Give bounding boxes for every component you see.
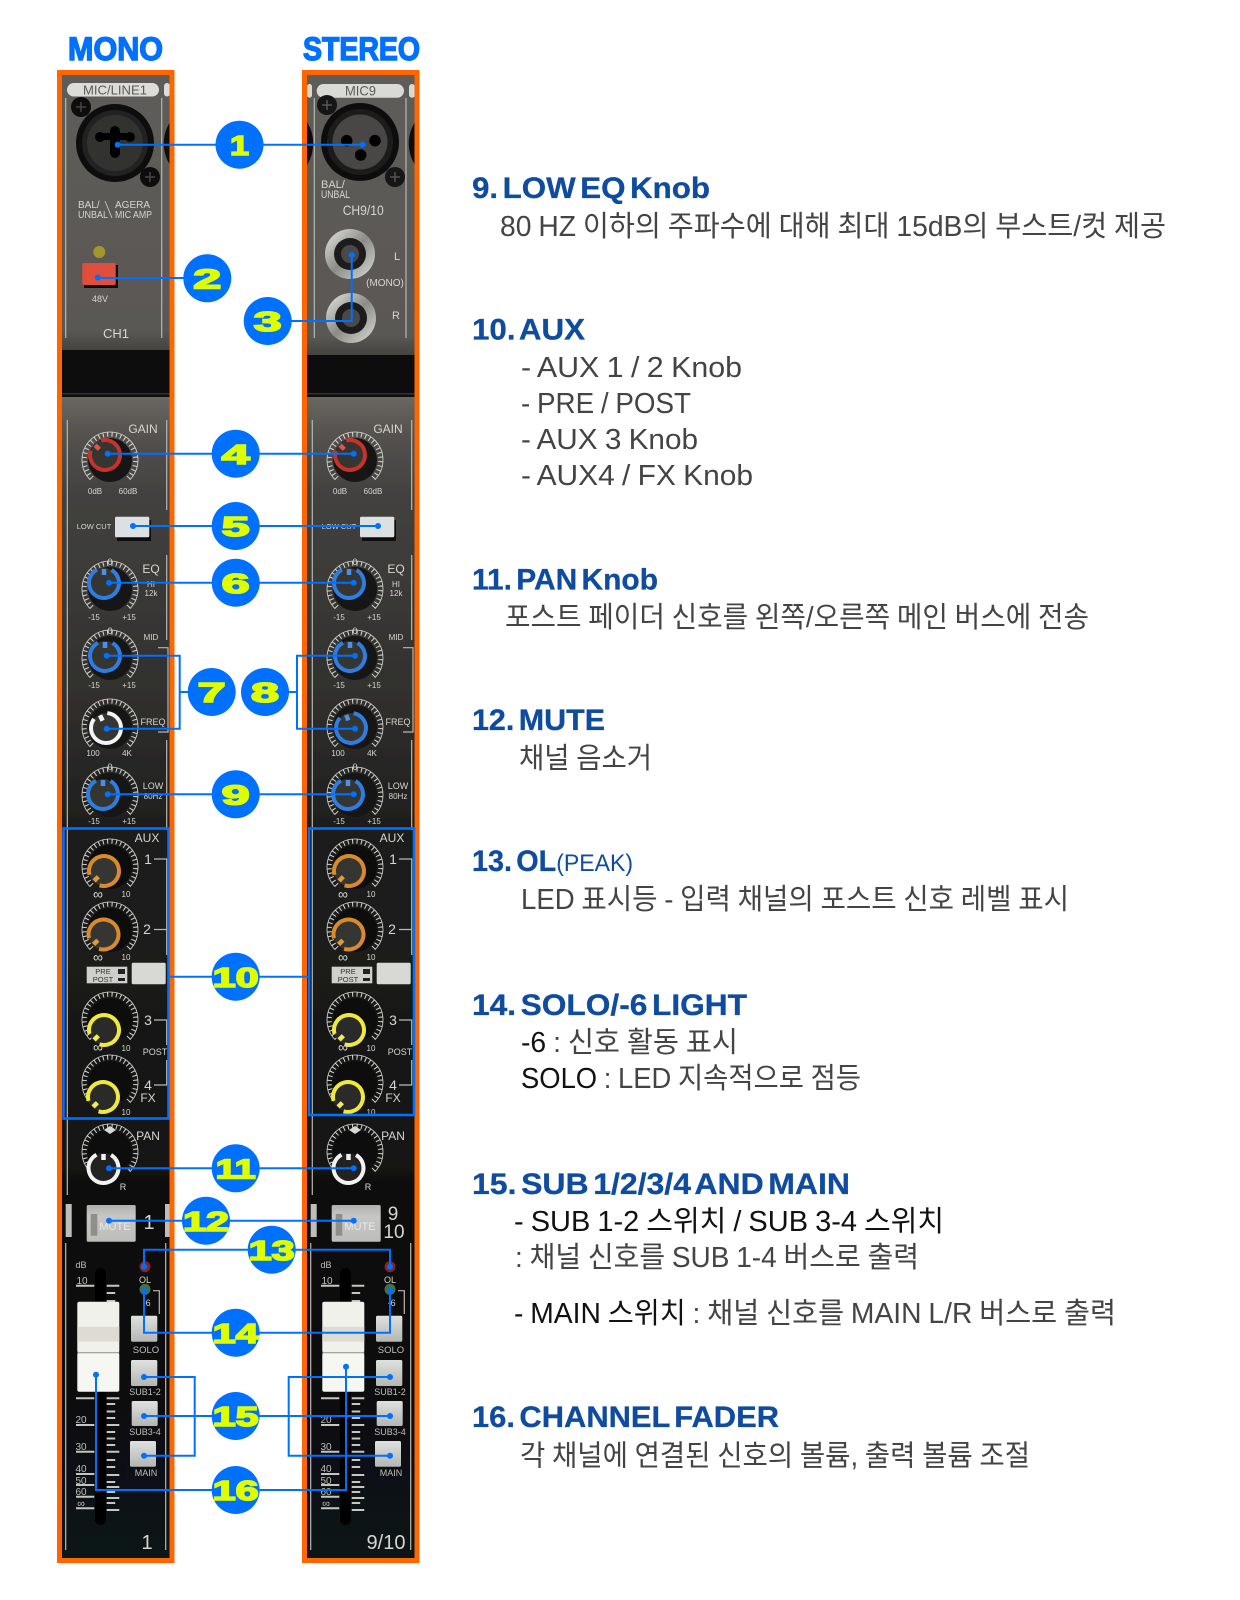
fader scale: 50 [75, 1476, 87, 1487]
label: LOW CUT: LOW CUT [77, 522, 112, 531]
labels: EQ low range: 0 [107, 762, 113, 772]
labels: gain range: 60dB [119, 487, 137, 496]
labels: AUX 4 FX: FX [385, 1091, 401, 1105]
description 13: LED 표시등 - 입력 채널의 포스트 신호 레벨 표시 [521, 883, 1069, 916]
channel label: MIC9: MIC9 [345, 82, 376, 98]
button: 48V phantom power [82, 263, 118, 288]
labels: EQ low range: -15 [333, 817, 345, 826]
labels: EQ high range: 0 [352, 557, 358, 567]
labels: AUX 3 [93, 1012, 168, 1057]
label: PAN: PAN [381, 1129, 405, 1143]
knob: pan [82, 1124, 138, 1188]
labels: AUX 1: 10 [367, 890, 376, 899]
description 9: 80 HZ 이하의 주파수에 대해 최대 15dB의 부스트/컷 제공 [500, 210, 1166, 243]
knob: AUX 2 [82, 902, 138, 953]
badge 14: 14 [213, 1318, 259, 1349]
badge 4 [212, 430, 260, 478]
badge 8 [241, 668, 289, 716]
labels: gain range: 60dB [364, 487, 382, 496]
connector end dots [93, 142, 393, 1459]
description MAIN switch: - MAIN 스위치 : 채널 신호를 MAIN L/R 버스로 출력 [514, 1297, 1116, 1330]
LED: OL and -6: -6 [388, 1298, 396, 1308]
labels: EQ frequency range: FREQ [385, 717, 411, 727]
list item AUX 1/2: - AUX 1 / 2 Knob [521, 352, 742, 384]
heading 16: 16. CHANNEL FADER [472, 1401, 779, 1434]
labels: EQ high range [333, 557, 381, 622]
label: PAN R: R [365, 1182, 372, 1192]
label: EQ HI 12k [387, 562, 405, 598]
label: LOW CUT: LOW CUT [322, 522, 357, 531]
callout frame: mono AUX section [64, 828, 168, 1118]
button: MAIN: MAIN [380, 1468, 402, 1478]
label: GAIN: GAIN [373, 422, 403, 436]
label: PRE POST [87, 967, 127, 984]
label: PRE POST: PRE [340, 967, 356, 976]
fader scale [75, 1260, 119, 1525]
label: EQ HI 12k [142, 562, 160, 598]
labels: EQ mid range: 0 [107, 626, 113, 636]
button: SUB3-4: SUB3-4 [129, 1427, 161, 1437]
labels: AUX 4 FX: 10 [122, 1108, 131, 1117]
labels: EQ high range: +15 [122, 613, 136, 622]
heading 14: 14. SOLO/-6 LIGHT [472, 989, 747, 1022]
labels: EQ mid range: MID [144, 633, 159, 642]
button: mute [311, 1204, 381, 1242]
heading 15: 15. SUB 1/2/3/4 AND MAIN [472, 1168, 850, 1201]
text block: 11 PAN Knob [472, 564, 1089, 634]
knob: pan [327, 1124, 383, 1188]
labels: AUX 1 [93, 851, 152, 902]
labels: gain range [88, 487, 137, 496]
label: PRE POST: POST [338, 975, 359, 984]
button: SOLO [376, 1316, 404, 1356]
badge 11 [212, 1144, 260, 1192]
fader scale: 30 [75, 1442, 87, 1453]
description SUB switch: - SUB 1-2 스위치 / SUB 3-4 스위치 [514, 1205, 944, 1238]
fader cap [77, 1302, 119, 1392]
knob: EQ high [327, 561, 383, 611]
label: GAIN: GAIN [128, 422, 158, 436]
fader scale [320, 1260, 364, 1525]
LED: OL and -6 [384, 1261, 404, 1314]
labels: BAL/UNBAL [321, 179, 350, 201]
labels: AUX 3: POST [143, 1047, 168, 1057]
label: PRE POST: POST [93, 975, 114, 984]
knob: EQ mid [82, 630, 138, 680]
labels: AUX 1: 1 [144, 851, 152, 867]
knob: EQ high [82, 561, 138, 611]
fader scale: 50 [320, 1476, 332, 1487]
text block: 14 SOLO/-6 LIGHT [472, 989, 861, 1095]
text block: 16 CHANNEL FADER [472, 1401, 1030, 1472]
label: EQ HI 12k: EQ [142, 562, 160, 576]
button: SOLO: SOLO [378, 1345, 404, 1356]
label: PAN R: R [120, 1182, 127, 1192]
labels: EQ mid range: MID [389, 633, 404, 642]
badge 6 [212, 559, 260, 607]
description 12: 채널 음소거 [519, 743, 652, 775]
labels: AUX 2: ∞ [93, 949, 103, 965]
labels: EQ low range: -15 [88, 817, 100, 826]
badge 14 [212, 1309, 260, 1357]
description -6: -6 : 신호 활동 표시 [521, 1026, 738, 1059]
connector lines [96, 145, 390, 1490]
button: MAIN [375, 1441, 402, 1478]
fader scale: 40 [75, 1464, 87, 1475]
labels: BAL/UNBAL AGERA MIC AMP: MIC AMP [115, 210, 152, 221]
button: SUB3-4 [129, 1401, 161, 1437]
labels: AUX 4 FX: 4 [389, 1077, 397, 1093]
label: EQ HI 12k: HI [147, 580, 155, 589]
labels: EQ low range: 80Hz [144, 792, 162, 801]
text block: 15 SUB and MAIN [472, 1168, 1116, 1330]
badge 10: 10 [213, 962, 259, 993]
button: SUB3-4 [374, 1401, 406, 1437]
labels: EQ high range: 0 [107, 557, 113, 567]
label: fader number 1: 1 [141, 1532, 153, 1554]
labels: EQ high range: -15 [88, 613, 100, 622]
label: EQ HI 12k: EQ [387, 562, 405, 576]
button: SUB1-2: SUB1-2 [129, 1387, 161, 1397]
button: mute: MUTE [99, 1221, 131, 1233]
title: STEREO: STEREO [303, 31, 420, 67]
badge 1 [216, 121, 264, 169]
label: AUX: AUX [135, 831, 159, 845]
labels: gain range: 0dB [88, 487, 102, 496]
frame: stereo orange border [304, 72, 417, 1560]
labels: AUX 4 FX: 4 [144, 1077, 152, 1093]
description SOLO: SOLO : LED 지속적으로 점등 [521, 1063, 861, 1095]
LED: OL and -6: OL [384, 1275, 396, 1285]
badge 2 [183, 254, 231, 302]
button: low cut [115, 517, 151, 541]
labels: AUX 1: ∞ [93, 886, 103, 902]
labels: EQ frequency range: 4K [367, 749, 378, 758]
label: CH1: CH1 [103, 326, 129, 341]
knob: gain [82, 432, 138, 482]
button: MAIN [130, 1441, 157, 1478]
label: channel number 9 10: 10 [383, 1222, 405, 1243]
frame: mono orange border [60, 72, 172, 1560]
fader scale: dB [75, 1260, 87, 1270]
badge 5: 5 [222, 511, 250, 542]
fader scale: 40 [320, 1464, 332, 1475]
badge 10 [212, 953, 260, 1001]
labels: EQ high range: +15 [367, 613, 381, 622]
heading 13: 13. OL(PEAK) [472, 845, 633, 878]
fader scale: dB [320, 1260, 332, 1270]
knob: AUX 3 [82, 992, 138, 1048]
knob: AUX 3 [327, 992, 383, 1048]
callout frame: stereo AUX section [309, 828, 414, 1115]
labels: gain range [333, 487, 382, 496]
badge 7: 7 [198, 677, 226, 708]
labels: AUX 3: 3 [389, 1012, 397, 1028]
label: AUX: AUX [380, 831, 404, 845]
fader scale: 30 [320, 1442, 332, 1453]
labels: BAL/UNBAL AGERA MIC AMP [78, 200, 152, 221]
labels: AUX 2: 10 [367, 953, 376, 962]
labels: AUX 2 [93, 921, 151, 965]
label: PRE POST: PRE [95, 967, 111, 976]
badge 12: 12 [183, 1206, 229, 1237]
labels: AUX 4 FX [367, 1077, 401, 1117]
labels: AUX 2: 10 [122, 953, 131, 962]
panel: mono channel strip [62, 75, 170, 1559]
knob: AUX 1 [82, 839, 138, 889]
labels: EQ low range [333, 762, 409, 826]
labels: EQ high range [88, 557, 136, 622]
label: 48V: 48V [92, 294, 108, 304]
knob: AUX 2 [327, 902, 383, 953]
knob: EQ frequency [82, 699, 138, 749]
badge 3 [244, 297, 292, 345]
button: low cut [360, 517, 396, 541]
badge 13 [248, 1226, 296, 1274]
button: SOLO: SOLO [133, 1345, 159, 1356]
connector: XLR jack [307, 95, 415, 187]
fader scale: 20 [75, 1415, 87, 1426]
badge 13: 13 [249, 1235, 295, 1266]
fader scale: 60 [320, 1487, 332, 1498]
labels: EQ frequency range [86, 717, 166, 758]
labels: L (MONO) R [366, 251, 404, 322]
jack: R [326, 293, 376, 343]
labels: AUX 3: POST [388, 1047, 413, 1057]
labels: AUX 2: ∞ [338, 949, 348, 965]
badge 15 [212, 1392, 260, 1440]
heading 9: 9. LOW EQ Knob [472, 172, 710, 205]
fader scale: 10 [321, 1276, 333, 1287]
button: PRE/POST [377, 963, 411, 984]
list item PRE/POST: - PRE / POST [521, 388, 691, 420]
badge 1: 1 [230, 130, 249, 161]
fader scale: 10 [76, 1276, 88, 1287]
labels: BAL/UNBAL AGERA MIC AMP: AGERA [115, 200, 150, 211]
label: fader number 9/10: 9/10 [367, 1532, 405, 1554]
badge 2: 2 [193, 264, 221, 294]
labels: BAL/UNBAL AGERA MIC AMP: UNBAL [78, 210, 108, 221]
channel label: MIC/LINE1 [67, 82, 170, 98]
description 16: 각 채널에 연결된 신호의 볼륨, 출력 볼륨 조절 [520, 1440, 1030, 1472]
LED: OL and -6: OL [139, 1275, 151, 1285]
jack: L [325, 229, 375, 279]
knob: AUX 4 [82, 1055, 138, 1115]
labels: AUX 1: ∞ [338, 886, 348, 902]
labels: L (MONO) R: (MONO) [366, 278, 404, 289]
labels: EQ frequency range: 100 [86, 749, 100, 758]
labels: AUX 1: 10 [122, 890, 131, 899]
labels: AUX 3: ∞ [93, 1039, 103, 1055]
labels: EQ low range: 0 [352, 762, 358, 772]
label: PRE POST [332, 967, 372, 984]
labels: EQ low range: LOW [388, 781, 409, 791]
connector: combo jack [71, 97, 170, 187]
text block: 9 LOW EQ Knob [472, 172, 1166, 243]
labels: AUX 1 [338, 851, 397, 902]
heading 10: 10. AUX [472, 314, 585, 346]
button: PRE/POST [132, 963, 166, 984]
channel label: MIC9 [307, 82, 415, 98]
badge 5 [212, 502, 260, 550]
labels: EQ frequency range [331, 717, 411, 758]
knob: EQ mid [327, 630, 383, 680]
fader scale: 60 [75, 1487, 87, 1498]
label: CH9/10: CH9/10 [343, 202, 384, 218]
badge 15: 15 [213, 1401, 259, 1432]
LED: 48V [93, 246, 105, 258]
label: PAN: PAN [136, 1129, 160, 1143]
LED: OL and -6: -6 [143, 1298, 151, 1308]
list item AUX4/FX: - AUX4 / FX Knob [521, 460, 753, 492]
labels: AUX 1: 1 [389, 851, 397, 867]
badge 7 [188, 668, 236, 716]
labels: EQ mid range: 0 [352, 626, 358, 636]
labels: AUX 4 FX: FX [140, 1091, 156, 1105]
button: SUB1-2 [129, 1360, 161, 1397]
labels: EQ low range: +15 [367, 817, 381, 826]
labels: AUX 3: ∞ [338, 1039, 348, 1055]
labels: EQ low range: +15 [122, 817, 136, 826]
labels: AUX 2 [338, 921, 396, 965]
labels: EQ high range: -15 [333, 613, 345, 622]
labels: EQ frequency range: 4K [122, 749, 133, 758]
channel label: MIC/LINE1: MIC/LINE1 [83, 82, 147, 98]
button: SOLO [131, 1316, 159, 1356]
labels: BAL/UNBAL: UNBAL [321, 189, 350, 201]
badge 8: 8 [251, 677, 279, 708]
knob: EQ frequency [327, 699, 383, 749]
badge 3: 3 [254, 306, 282, 337]
labels: gain range: 0dB [333, 487, 347, 496]
LED: OL and -6 [139, 1261, 159, 1314]
labels: EQ frequency range: FREQ [140, 717, 166, 727]
button: mute: MUTE [344, 1221, 376, 1233]
text block: 12 MUTE [472, 704, 652, 775]
labels: AUX 3 [338, 1012, 413, 1057]
labels: EQ mid range: -15 [88, 681, 100, 690]
heading 12: 12. MUTE [472, 704, 605, 737]
fader cap [322, 1302, 364, 1392]
knob: EQ low [82, 767, 138, 817]
knob: gain [327, 432, 383, 482]
labels: AUX 4 FX [122, 1077, 156, 1117]
label: EQ HI 12k: HI [392, 580, 400, 589]
labels: EQ mid range: +15 [122, 681, 136, 690]
labels: AUX 3: 10 [122, 1044, 131, 1053]
labels: AUX 4 FX: 10 [367, 1108, 376, 1117]
label: EQ HI 12k: 12k [145, 589, 158, 598]
panel: stereo channel strip [307, 75, 415, 1559]
badge 9: 9 [222, 780, 250, 810]
button: mute [66, 1204, 170, 1242]
badge 16: 16 [213, 1475, 259, 1506]
fader scale: ∞ [77, 1498, 85, 1510]
badge 11: 11 [216, 1154, 256, 1184]
badge 9 [212, 770, 260, 818]
description 11: 포스트 페이더 신호를 왼쪽/오른쪽 메인 버스에 전송 [505, 602, 1089, 634]
labels: EQ low range [88, 762, 164, 826]
title: MONO: MONO [68, 31, 163, 67]
badge 6: 6 [222, 568, 250, 599]
description SUB bus: : 채널 신호를 SUB 1-4 버스로 출력 [515, 1241, 919, 1274]
labels: AUX 3: 10 [367, 1044, 376, 1053]
button: SUB1-2: SUB1-2 [374, 1387, 406, 1397]
list item AUX 3: - AUX 3 Knob [521, 424, 698, 456]
text block: 10 AUX [472, 314, 753, 492]
label: EQ HI 12k: 12k [390, 589, 403, 598]
fader scale: 20 [320, 1415, 332, 1426]
text block: 13 OL PEAK [472, 845, 1069, 916]
labels: AUX 3: 3 [144, 1012, 152, 1028]
labels: EQ low range: 80Hz [389, 792, 407, 801]
knob: EQ low [327, 767, 383, 817]
heading 11: 11. PAN Knob [472, 564, 658, 596]
labels: BAL/UNBAL: BAL/ [321, 179, 346, 191]
labels: BAL/UNBAL AGERA MIC AMP: BAL/ [78, 200, 100, 211]
labels: EQ mid range: +15 [367, 681, 381, 690]
button: SUB3-4: SUB3-4 [374, 1427, 406, 1437]
labels: AUX 2: 2 [143, 921, 151, 937]
badge 12 [182, 1197, 230, 1245]
button: SUB1-2 [374, 1360, 406, 1397]
labels: EQ mid range: -15 [333, 681, 345, 690]
label: channel number 1: 1 [143, 1212, 155, 1234]
labels: EQ frequency range: 100 [331, 749, 345, 758]
button: MAIN: MAIN [135, 1468, 157, 1478]
labels: L (MONO) R: L [394, 251, 400, 263]
fader scale: ∞ [322, 1498, 330, 1510]
knob: AUX 1 [327, 839, 383, 889]
knob: AUX 4 [327, 1055, 383, 1115]
label: channel number 9 10: 9 [388, 1204, 398, 1225]
labels: EQ low range: LOW [143, 781, 164, 791]
label: channel number 9 10 [383, 1204, 405, 1243]
labels: EQ mid range [88, 626, 159, 690]
labels: EQ mid range [333, 626, 404, 690]
badge 16 [212, 1466, 260, 1514]
labels: AUX 2: 2 [388, 921, 396, 937]
badge 4: 4 [222, 439, 250, 470]
labels: L (MONO) R: R [392, 310, 400, 322]
